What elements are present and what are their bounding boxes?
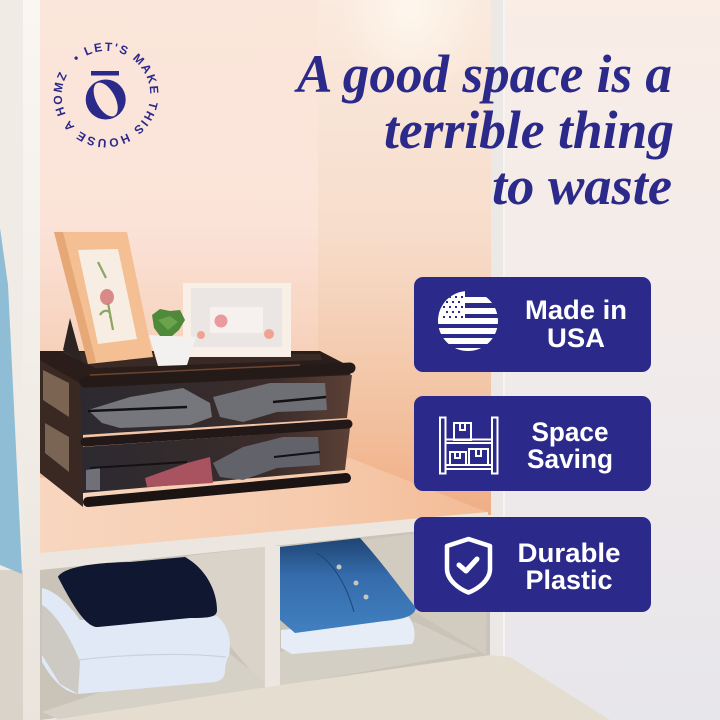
headline: terrible thing	[384, 100, 674, 160]
label: Plastic	[526, 565, 612, 595]
label: USA	[547, 323, 605, 353]
headline: A good space is a	[294, 44, 672, 104]
label: Made in	[525, 295, 627, 325]
shelf front edge	[40, 512, 488, 570]
badge: Made in USA	[414, 277, 651, 372]
label	[525, 295, 627, 353]
icon: shield with check	[447, 539, 490, 592]
headline: to waste	[492, 156, 672, 216]
folded clothes left stack	[42, 557, 230, 694]
badge: Space Saving	[414, 396, 651, 491]
drawer unit	[40, 351, 352, 507]
lower compartments	[40, 520, 490, 720]
badge: Durable Plastic	[414, 517, 651, 612]
label: Durable	[518, 538, 620, 568]
shelf top surface	[40, 458, 487, 555]
picture frame: wood	[54, 232, 153, 364]
label	[518, 538, 620, 595]
label: Space	[532, 417, 608, 447]
logo mark	[86, 71, 126, 120]
picture frame: white	[183, 283, 291, 357]
label: Saving	[527, 444, 613, 474]
headline	[294, 44, 674, 216]
folded clothes right stack	[280, 538, 416, 654]
carpet	[53, 655, 610, 720]
plant pot	[149, 309, 196, 366]
icon: shelf with boxes	[440, 418, 498, 474]
logo ring text: • LET'S MAKE THIS HOUSE A HOMZ	[54, 42, 158, 148]
label	[527, 417, 613, 474]
hanging shirt	[0, 228, 22, 574]
logo badge	[54, 42, 158, 148]
icon: US flag	[438, 290, 498, 352]
